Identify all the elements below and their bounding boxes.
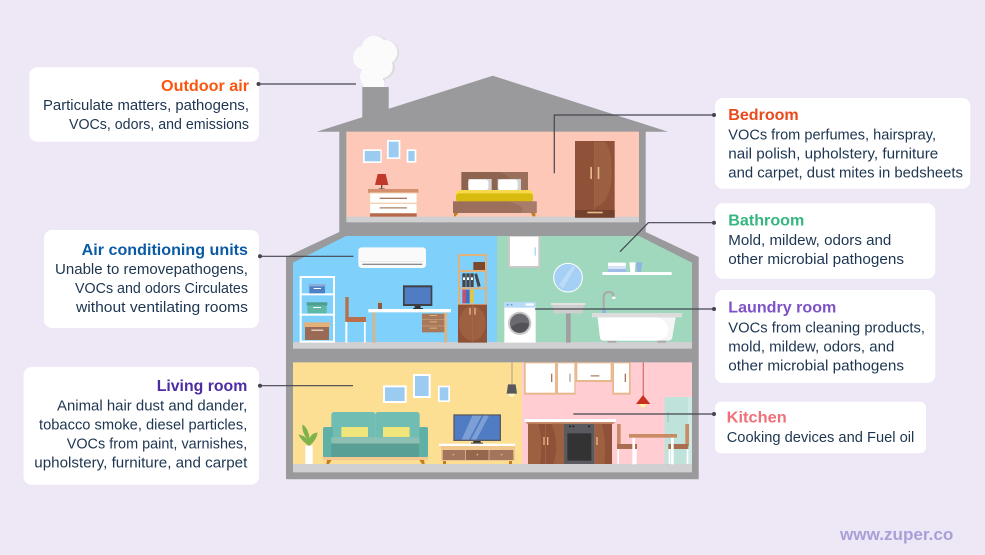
towel shelf [602,262,672,275]
air conditioner [358,247,426,268]
callout: outdoor air: VOCs, odors, and emissions [69,116,249,133]
website credit: www.zuper.co [839,525,953,544]
bathtub [592,292,682,343]
house illustration [286,36,699,479]
callout: laundry room: other microbial pathogens [728,357,904,374]
callout: outdoor air [29,67,259,142]
smoke cloud [353,36,399,89]
callout: bedroom: nail polish, upholstery, furniture [728,145,938,162]
callout: laundry room: VOCs from cleaning products, [728,319,925,336]
callout: bedroom: Bedroom [728,107,799,124]
sofa [323,412,428,464]
callout: living room: VOCs from paint, varnishes, [67,436,247,453]
round mirror [554,263,582,292]
pendant lamp [507,362,517,397]
callout: bedroom: VOCs from perfumes, hairspray, [728,126,936,143]
fridge [665,397,692,464]
room: study wall [293,236,497,342]
callout: kitchen [715,402,926,453]
callout: living room: tobacco smoke, diesel particles, [39,417,247,434]
leader lines [258,84,714,414]
callout: living room: Living room [157,378,247,395]
wall pictures [383,374,450,403]
wardrobe [575,141,615,218]
callout: air conditioning units: Unable to removepathogens, [55,261,248,278]
hanging kitchen light [636,362,650,407]
table lamp [375,174,388,190]
rooms: air conditioned study and bathroom [293,236,692,349]
bed [453,172,537,216]
callout: laundry room: mold, mildew, odors, and [728,338,894,355]
room: bathroom wall [497,236,692,342]
room: kitchen wall [522,362,692,464]
house walls [286,131,699,479]
callout: living room: Animal hair dust and dander, [57,398,247,415]
desk chair [345,297,366,343]
upper kitchen cabinets [524,362,631,395]
storage shelf with boxes [300,277,335,342]
callout: air conditioning units: VOCs and odors Circulates [75,280,248,297]
potted plant [298,424,318,464]
callout: air conditioning units: without ventilating rooms [75,299,248,316]
callout: air conditioning units [44,230,259,328]
bookcase [458,255,487,343]
callout: outdoor air: Outdoor air [161,78,249,95]
callout: bedroom: and carpet, dust mites in bedsheets [728,164,963,181]
callout: bathroom: Mold, mildew, odors and [728,232,891,249]
nightstand [368,189,418,217]
room: living room wall [293,362,522,464]
bathroom cabinet [508,236,540,268]
callout: outdoor air: Particulate matters, pathogens, [43,97,249,114]
callout: kitchen: Kitchen [727,410,787,427]
callout: living room [24,367,259,485]
callout: bedroom [715,98,970,189]
room: bedroom [346,132,639,222]
callout: bathroom: other microbial pathogens [728,251,904,268]
roof and chimney [317,76,668,132]
pedestal sink [551,303,585,343]
rooms: living room and kitchen [293,362,692,472]
computer monitor [403,285,432,309]
dining table and chairs [617,424,689,464]
washing machine [504,302,536,343]
callout: bathroom [715,203,935,279]
callout: kitchen: Cooking devices and Fuel oil [727,429,914,446]
kitchen counter and oven [525,419,616,464]
leader line end dots [256,82,716,416]
wall pictures [363,140,416,163]
callout: bathroom: Bathroom [728,213,804,230]
tv cabinet [439,444,515,464]
callout: air conditioning units: Air conditioning units [82,242,248,259]
television [453,414,501,444]
callout: laundry room [715,290,935,383]
callout: laundry room: Laundry room [728,300,836,317]
desk [368,301,451,343]
callout: living room: upholstery, furniture, and carpet [34,455,248,472]
